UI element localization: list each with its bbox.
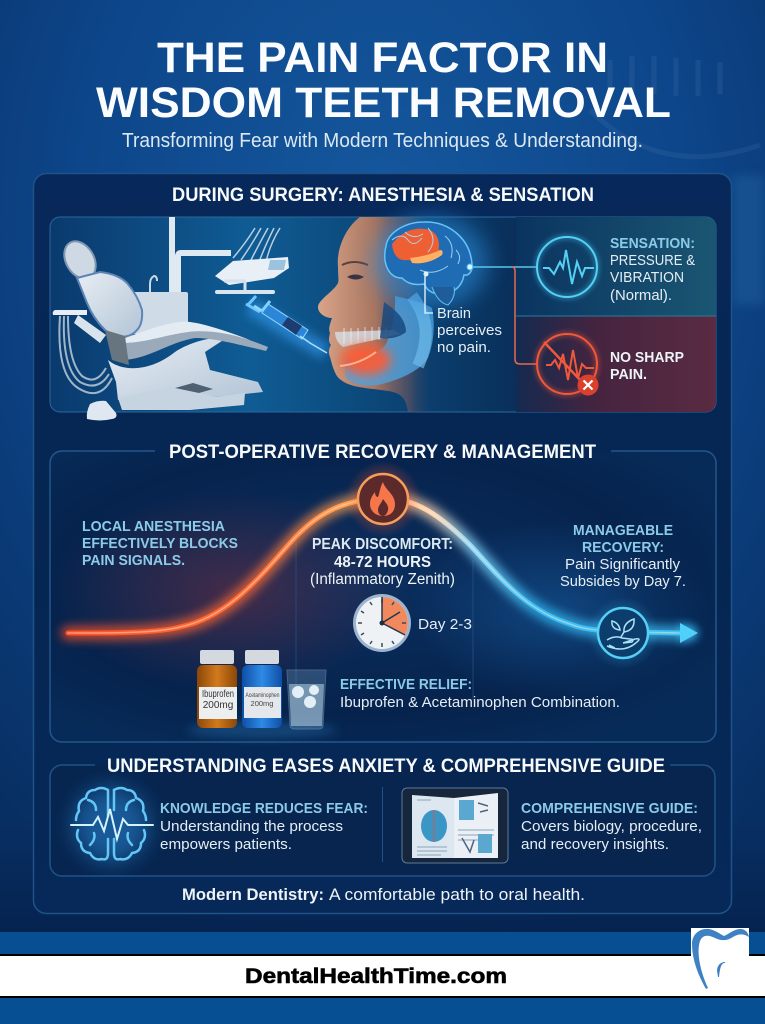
- heading: understanding: UNDERSTANDING EASES ANXIETY & COMPREHENSIVE GUIDE: [107, 756, 665, 777]
- text: brain perceives no pain: no pain.: [437, 339, 491, 356]
- chart: pain curve: [68, 498, 690, 633]
- title: THE PAIN FACTOR IN: [157, 34, 608, 82]
- text: manageable recovery: MANAGEABLE: [573, 522, 673, 539]
- footer website: DentalHealthTime.com: [245, 965, 507, 988]
- subtitle: Transforming Fear with Modern Techniques & Understanding.: [122, 130, 643, 152]
- text: manageable recovery: Subsides by Day 7.: [560, 573, 686, 590]
- bottle: acetaminophen: Acetaminophen: [246, 692, 280, 699]
- pedal: [87, 401, 116, 420]
- panel: during surgery: [50, 216, 716, 420]
- icon: flame peak: [345, 461, 421, 537]
- bottle: ibuprofen: 200mg: [203, 700, 233, 711]
- icon: sensation wave: [537, 237, 597, 297]
- illustration: dental chair: [53, 217, 289, 420]
- text: no sharp pain: PAIN.: [610, 366, 647, 383]
- bottle: ibuprofen: [197, 650, 237, 728]
- text: knowledge reduces fear: KNOWLEDGE REDUCES FEAR:: [160, 800, 368, 817]
- logo: tooth: [691, 928, 749, 989]
- text: comprehensive guide: Covers biology, procedure,: [521, 818, 702, 835]
- illustration: glowing brain: [372, 216, 488, 308]
- connector dots: [424, 272, 428, 276]
- text: brain perceives no pain: Brain: [437, 305, 471, 322]
- heading: during surgery: DURING SURGERY: ANESTHESIA & SENSATION: [172, 185, 594, 206]
- lower body: [108, 337, 263, 400]
- text: no sharp pain: [610, 349, 684, 383]
- panel: understanding: [50, 765, 715, 876]
- glass of water: [287, 670, 326, 729]
- text: sensation: PRESSURE &: [610, 252, 695, 269]
- icon: no sharp pain: [537, 334, 598, 396]
- text: local anesthesia: EFFECTIVELY BLOCKS: [82, 535, 238, 552]
- text: peak discomfort: PEAK DISCOMFORT:: [312, 536, 453, 553]
- sensation band: [516, 217, 716, 316]
- title: [96, 34, 671, 127]
- text: sensation: [610, 235, 695, 304]
- text: manageable recovery: [560, 522, 686, 590]
- text: modern dentistry: Modern Dentistry:: [182, 885, 324, 904]
- no sharp pain band: [516, 316, 716, 412]
- text: comprehensive guide: COMPREHENSIVE GUIDE:: [521, 800, 698, 817]
- footer band: [0, 932, 765, 1024]
- arrow: recovery trend: [680, 623, 698, 643]
- icon: leaf in hand: [587, 597, 659, 669]
- connector lines: [425, 267, 536, 364]
- divider: [382, 787, 384, 862]
- text: brain perceives no pain: [437, 305, 502, 356]
- text: knowledge reduces fear: Understanding the process: [160, 818, 343, 835]
- bottle: ibuprofen: Ibuprofen: [202, 689, 234, 700]
- headrest strap: [105, 330, 129, 365]
- text: peak discomfort: (Inflammatory Zenith): [310, 571, 455, 588]
- text: knowledge reduces fear: empowers patients.: [160, 836, 292, 853]
- text: comprehensive guide: [521, 800, 702, 853]
- text: effective relief: Ibuprofen & Acetaminophen Combination.: [340, 694, 620, 711]
- bottle: acetaminophen: [242, 650, 282, 728]
- title: WISDOM TEETH REMOVAL: [96, 79, 671, 127]
- text: peak discomfort: 48-72 HOURS: [334, 554, 431, 571]
- illustration: syringe: [246, 296, 327, 353]
- text: manageable recovery: Pain Significantly: [565, 556, 680, 573]
- text: knowledge reduces fear: [160, 800, 368, 853]
- text: local anesthesia: LOCAL ANESTHESIA: [82, 518, 225, 535]
- text: effective relief: [340, 676, 620, 711]
- panel: post-operative recovery: [50, 451, 716, 742]
- text: local anesthesia: [82, 518, 238, 569]
- text: sensation: SENSATION:: [610, 235, 695, 252]
- illustration: face profile with jaw: [318, 217, 434, 412]
- text: local anesthesia: PAIN SIGNALS.: [82, 552, 185, 569]
- text: modern dentistry: [182, 885, 585, 904]
- icon: glowing brain wave: [71, 787, 153, 863]
- text: no sharp pain: NO SHARP: [610, 349, 684, 366]
- text: effective relief: EFFECTIVE RELIEF:: [340, 676, 472, 693]
- main panel: [34, 174, 732, 914]
- text: brain perceives no pain: perceives: [437, 322, 502, 339]
- label: day 2-3: Day 2-3: [418, 616, 472, 633]
- text: sensation: (Normal).: [610, 287, 672, 304]
- bottle: acetaminophen: 200mg: [251, 699, 273, 708]
- text: modern dentistry: A comfortable path to oral health.: [329, 885, 585, 904]
- text: sensation: VIBRATION: [610, 269, 684, 286]
- text: peak discomfort: [310, 536, 455, 588]
- text: comprehensive guide: and recovery insights.: [521, 836, 669, 853]
- text: manageable recovery: RECOVERY:: [582, 539, 664, 556]
- illustration: medicine bottles and water glass: [187, 650, 337, 738]
- heading: post-operative: POST-OPERATIVE RECOVERY & MANAGEMENT: [169, 442, 596, 463]
- seat: [120, 323, 268, 360]
- icon: clock: [353, 594, 411, 652]
- icon: tablet with guide: [402, 788, 508, 863]
